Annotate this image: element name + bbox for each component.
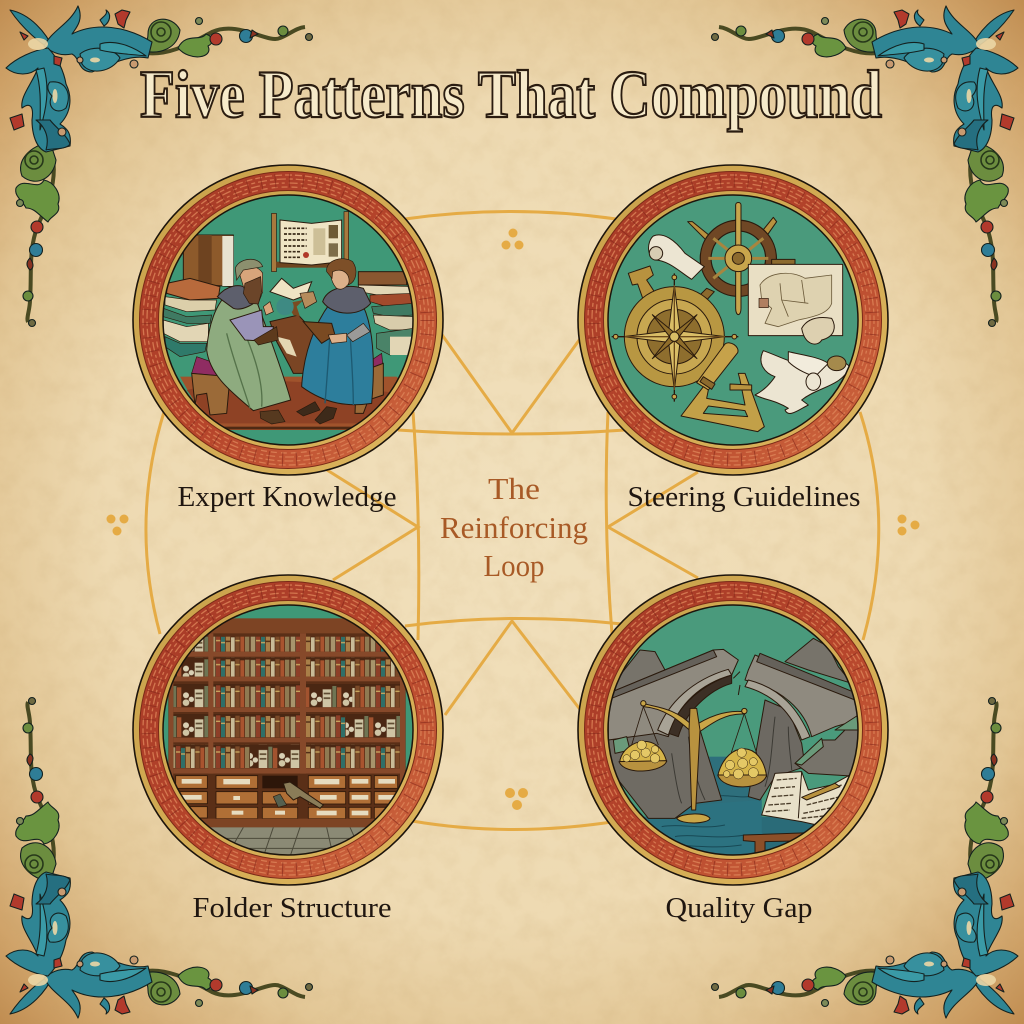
panel: Expert Knowledge medallion [133, 165, 443, 475]
label: Folder Structure: Folder Structure [192, 892, 392, 924]
corner flourish: bottom left [6, 698, 312, 1018]
scene: library shelves and drawers [160, 603, 420, 857]
label: Steering Guidelines: Steering Guidelines [628, 481, 860, 513]
center label: The Reinforcing Loop: The [488, 471, 540, 506]
corner flourish: top right [712, 6, 1018, 326]
triple dots: right [898, 514, 920, 536]
corner flourish: bottom right [712, 698, 1018, 1018]
scene: navigation instruments [605, 193, 865, 447]
medallion border ring [133, 575, 443, 885]
triple dots: top [502, 228, 524, 250]
panel: Quality Gap medallion [578, 575, 888, 885]
center label: The Reinforcing Loop: Reinforcing [440, 510, 588, 545]
panel: Folder Structure medallion [133, 575, 443, 885]
scene: broken bridge and scales [605, 603, 865, 863]
label: Expert Knowledge: Expert Knowledge [178, 481, 396, 513]
medallion border ring [133, 165, 443, 475]
medallion border ring [578, 575, 888, 885]
triple dots: left [106, 514, 128, 536]
title: Five Patterns That Compound [140, 56, 882, 132]
center label: The Reinforcing Loop: Loop [484, 548, 544, 583]
scene: scholars conversing [160, 193, 420, 447]
corner flourish: top left [6, 6, 312, 326]
reinforcing loop connection network [146, 212, 879, 830]
medallion border ring [578, 165, 888, 475]
panel: Steering Guidelines medallion [578, 165, 888, 475]
label: Quality Gap: Quality Gap [666, 892, 812, 924]
triple dots: bottom [505, 788, 528, 810]
center label: The Reinforcing Loop [440, 471, 588, 583]
